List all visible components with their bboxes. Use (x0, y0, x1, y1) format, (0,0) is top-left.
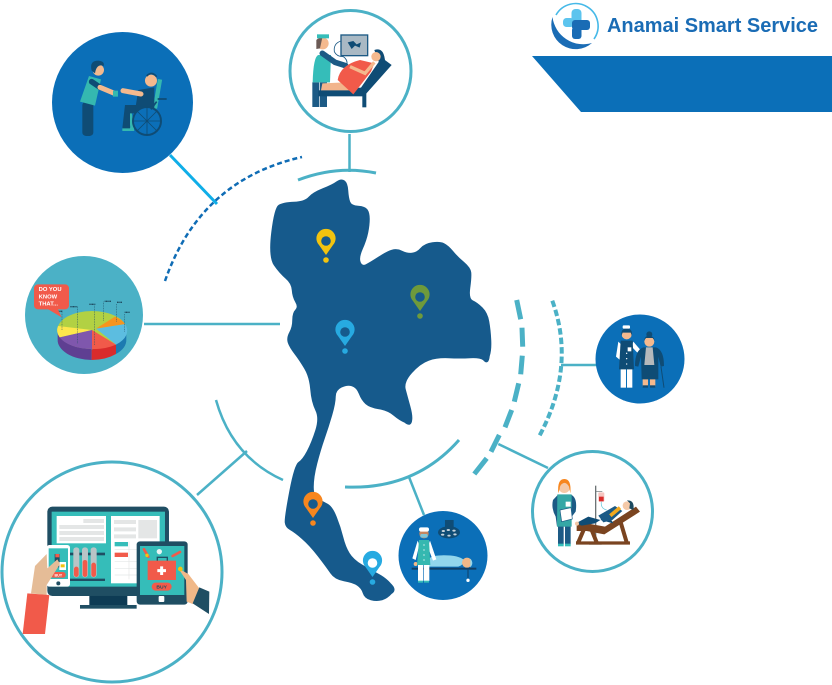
right hand and sleeve (178, 567, 209, 614)
panel: surgery (398, 511, 488, 600)
map of Thailand (271, 180, 491, 600)
nurse and patient figures (552, 479, 640, 546)
speech bubble text: DO YOU (39, 287, 62, 293)
panel: prenatal ultrasound (290, 10, 411, 132)
ultrasound figures (312, 34, 392, 107)
logo ring (551, 4, 598, 49)
pie sides (58, 330, 126, 360)
pin: blue (335, 320, 355, 354)
pin: orange (303, 492, 323, 526)
left hand and sleeve (23, 554, 60, 634)
wheelchair figures (80, 61, 167, 136)
phone buy label: BUY (54, 573, 63, 577)
nurse and elder figures (616, 325, 664, 388)
banner (532, 56, 832, 112)
pin: yellow (316, 229, 336, 263)
panel: blood transfusion care (532, 452, 652, 572)
panel: wheelchair care (52, 32, 193, 173)
logo text: Anamai Smart Service (607, 15, 818, 37)
speech bubble text: KNOW (39, 294, 58, 300)
panel: health data pie chart (25, 256, 143, 374)
speech bubble text: THAT... (39, 302, 58, 308)
panel: elderly care (596, 314, 684, 404)
panel: digital health devices (2, 462, 222, 682)
pie chart (34, 284, 130, 360)
pin: green (410, 285, 430, 319)
pie top (57, 311, 127, 349)
pin: south blue (363, 551, 382, 585)
connector lines and arcs (144, 134, 597, 515)
surgeon and patient figures (412, 520, 476, 583)
tablet (137, 541, 188, 605)
test tubes (68, 547, 105, 581)
devices illustration (23, 507, 209, 634)
phone (47, 545, 70, 587)
logo cross (563, 9, 590, 39)
tablet buy label: BUY (156, 585, 168, 591)
logo (551, 4, 818, 49)
